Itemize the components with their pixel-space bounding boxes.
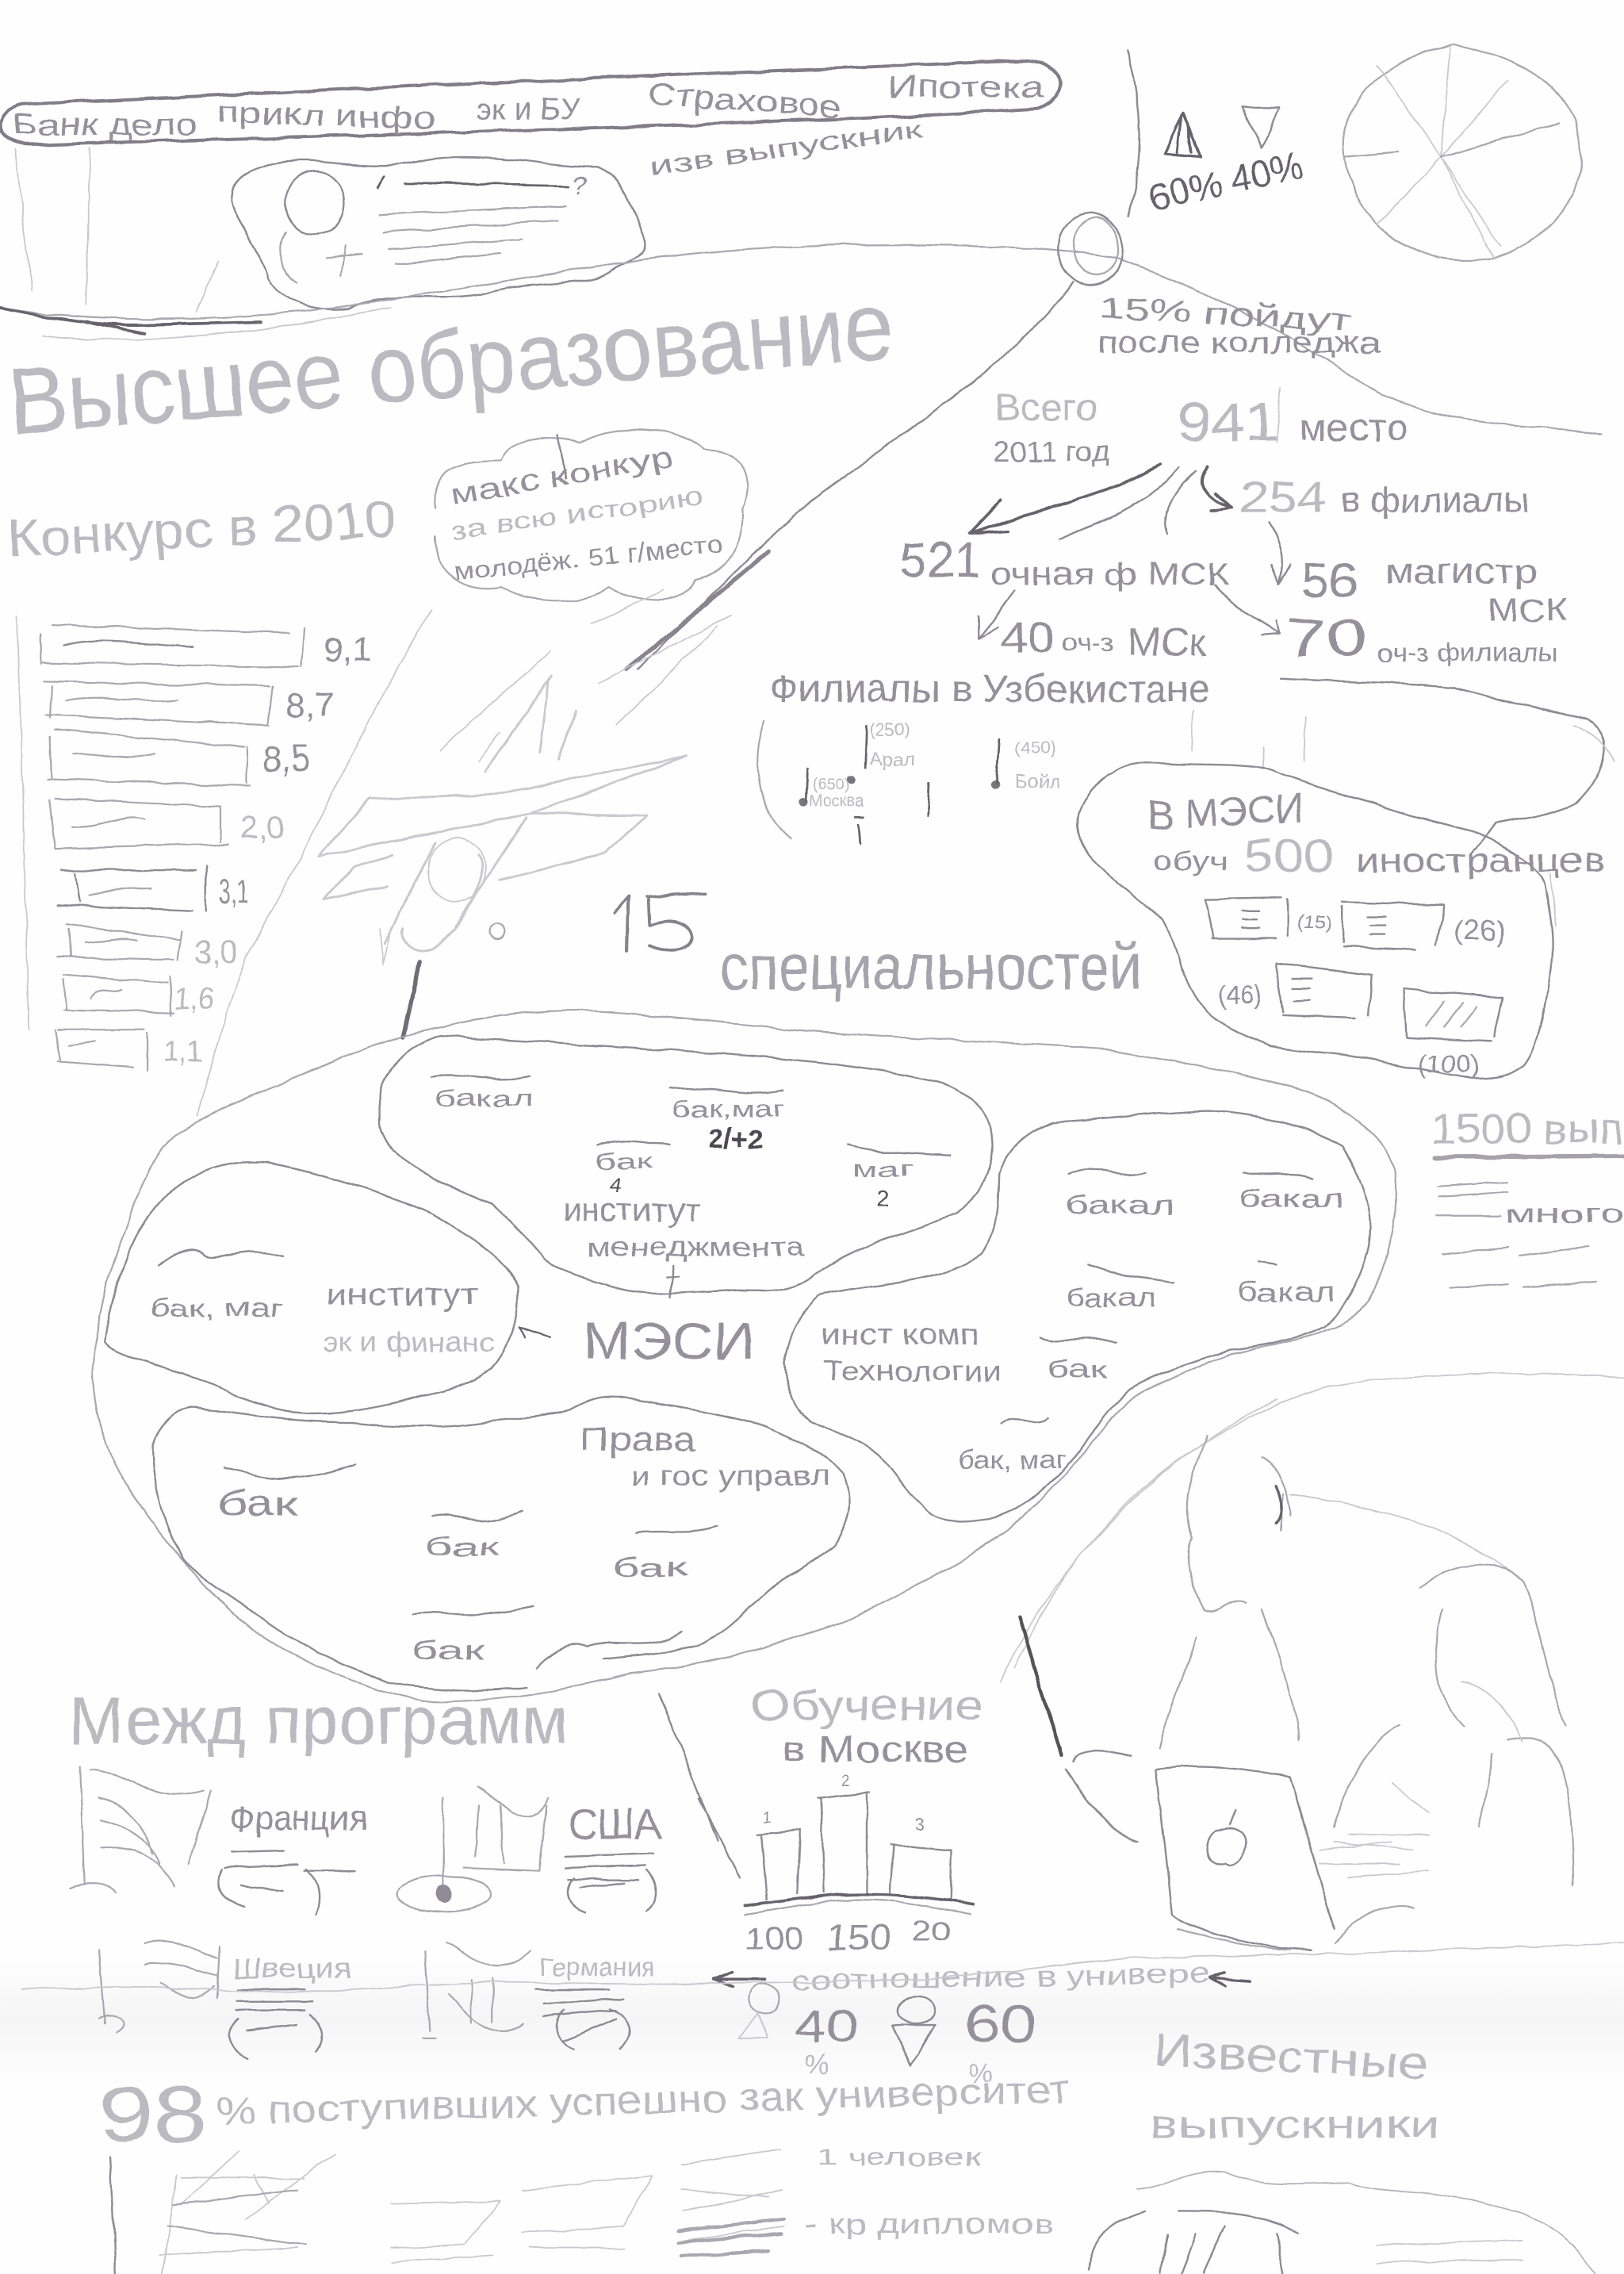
text: 2011: 2011 год: [994, 435, 1109, 467]
arrow left: [714, 1973, 765, 1987]
bak label 1: бак: [217, 1485, 298, 1524]
number: 500: 500: [1244, 830, 1334, 882]
technologies text: Технологии: [822, 1355, 1002, 1387]
label 6: [959, 1418, 1066, 1474]
cloud text line 2: за всю историю: [450, 482, 704, 545]
callout: graduate speech bubble: ?: [573, 171, 588, 200]
blob: institute of economics and finance: [105, 1162, 551, 1413]
callout: graduate speech bubble: [232, 157, 646, 309]
arrow to 521: [968, 464, 1160, 534]
bakal labels: бакал: [1064, 1190, 1174, 1219]
bar chart: competition by speciality: 9,1: [324, 631, 372, 669]
bar chart: competition by speciality: 8,5: [262, 738, 309, 780]
text: full time Moscow: очная ф МСК: [990, 556, 1230, 592]
bak label 2: [425, 1511, 522, 1562]
text: red diplomas: - кр дипломов: [805, 2207, 1054, 2240]
specialities text: специальностей: [721, 932, 1141, 1003]
decorative swoosh beside bars: [196, 609, 432, 1117]
pointer: [1019, 1617, 1061, 1754]
title: Высшее образование: [4, 271, 898, 455]
bar chart: competition by speciality: 3,1: [219, 872, 248, 911]
label: Франция: [229, 1799, 367, 1838]
icon group: book stacks: [110, 2149, 783, 2274]
law text: Права: [580, 1421, 696, 1457]
heading: competition 2010: Конкурс в 2010: [6, 489, 397, 568]
icon: male: [740, 1984, 779, 2038]
box 46: (46): [1218, 981, 1262, 1009]
mag 2 label: маг: [852, 1156, 914, 1181]
text: speciality 1: Банк дело: [12, 108, 197, 142]
label: Швеция: [232, 1952, 351, 1984]
bak label 3: [612, 1526, 718, 1582]
blob: law and public administration: [152, 1396, 850, 1690]
panel: MESI institutes map: [93, 1010, 1396, 1701]
pin: Boyl: Бойл: [1015, 771, 1059, 792]
connector stroke to blob: [403, 963, 419, 1037]
fold line of paper: [21, 1943, 1624, 1992]
line to full-time: [1059, 469, 1197, 539]
panel: study in Moscow: [745, 1681, 983, 1957]
text: MSK part time: МСк: [1128, 619, 1207, 664]
mag 2 label: [848, 1145, 950, 1212]
bar value 1: 100: [745, 1920, 803, 1956]
icon: airplane: [319, 590, 732, 964]
text: foreigners: иностранцев: [1356, 842, 1605, 879]
pin: Aral: (250): [870, 719, 910, 739]
bracket: [218, 1869, 320, 1915]
arrow to 254: [1202, 467, 1232, 511]
text: speciality 2: прикл инфо: [217, 95, 436, 136]
statistic: 98 percent: [98, 2068, 1070, 2157]
statistic: 98 percent: 98: [98, 2070, 208, 2157]
decorative column lines: [14, 148, 217, 312]
arrow to 56: [1269, 522, 1290, 585]
text: total year: Всего: [994, 385, 1097, 429]
text: one person note: 1 человек: [818, 2143, 981, 2171]
text: MSK: МСК: [1488, 592, 1568, 628]
panel: top header bar with specialities: [0, 61, 1061, 145]
bracket: [568, 1869, 656, 1912]
bak label 3: бак: [612, 1553, 688, 1582]
arrowhead right: [1211, 1973, 1250, 1987]
institute text 2: эк и финанс: [324, 1328, 495, 1358]
label 2: бакал: [1239, 1184, 1344, 1214]
institute name 2: менеджмента: [588, 1232, 806, 1261]
flag: Germany: [423, 1943, 656, 2050]
text: master: магистр: [1385, 552, 1537, 591]
number: 521: 521: [901, 534, 982, 589]
flag: France: [70, 1766, 367, 1915]
text: many: много: [1505, 1198, 1624, 1228]
callout: max competition cloud: [435, 429, 747, 601]
statistic text: % поступивших успешно зак университет: [216, 2068, 1070, 2134]
student figure: [1334, 1564, 1573, 1885]
bakalavr label: [431, 1075, 534, 1112]
label 3: [1066, 1264, 1174, 1312]
pin: Moscow: (650): [812, 777, 849, 795]
heading: famous graduates: Известные: [1152, 2024, 1430, 2090]
heading line 2: в Москве: [783, 1729, 968, 1771]
hand: [1066, 1750, 1138, 1842]
cloud text line 1: макс конкур: [448, 440, 675, 511]
number: 56: 56: [1300, 554, 1358, 608]
line 2: выпускники: [1150, 2103, 1440, 2146]
label 4: бакал: [1237, 1277, 1335, 1306]
chart bars: 3: [917, 1816, 925, 1834]
icon: male triangle: [1164, 113, 1201, 156]
panel: 1500 graduates: [1431, 1106, 1624, 1288]
heading: Межд программ: [68, 1683, 569, 1758]
blob: institute of computer technologies: [784, 1111, 1370, 1521]
bar chart: competition by speciality: 1,1: [163, 1035, 203, 1068]
text: students count: обуч: [1153, 846, 1228, 876]
text: college note: после колледжа: [1097, 325, 1381, 359]
institute name: институт: [563, 1191, 700, 1229]
bar value 3: 20: [910, 1916, 952, 1946]
bar chart: competition by speciality: 8,7: [285, 685, 334, 724]
icon: female triangle: [1243, 107, 1279, 148]
number: 60: 60: [964, 1994, 1036, 2053]
text: speciality 4: Страховое: [646, 76, 842, 125]
bak mag label: бак,маг: [672, 1097, 784, 1122]
bar chart: competition by speciality: 3,0: [194, 934, 239, 970]
illustration: students with laptop: [1001, 1374, 1624, 1950]
heading line 1: Обучение: [751, 1681, 983, 1730]
panel: student ratio: [714, 1958, 1250, 2089]
label 4: [1237, 1262, 1335, 1306]
box 26: (26): [1454, 914, 1506, 946]
text: seats: место: [1299, 406, 1408, 450]
bar chart: competition by speciality: 1,6: [174, 982, 214, 1014]
infographic connector line: [638, 283, 1073, 670]
chart bars: 2: [841, 1774, 850, 1791]
cloud text line 3: молодёж. 51 г/место: [453, 530, 724, 585]
number: 40: 40: [795, 2000, 859, 2052]
box 100: (100): [1418, 1049, 1479, 1079]
icon: female: [892, 1997, 935, 2067]
box 15: [1206, 898, 1331, 938]
bak label 4: бак: [412, 1636, 485, 1665]
bak 4 label: 4: [609, 1172, 621, 1197]
bakal labels: [1064, 1170, 1174, 1219]
bak mag label: [670, 1087, 784, 1122]
percent: %: [805, 2050, 829, 2080]
pin: Boyl: [990, 738, 1059, 792]
institute text: инст комп: [822, 1317, 979, 1352]
label: MESI centre: МЭСИ: [583, 1311, 754, 1370]
number: 70: 70: [1286, 608, 1367, 666]
text: 40: 40: [1001, 613, 1055, 662]
panel: gender triangles: [1059, 51, 1308, 286]
label: Германия: [539, 1953, 656, 1981]
text: ratio: соотношение в универе: [790, 1958, 1211, 1996]
label: США: [569, 1799, 661, 1848]
box 100: [1404, 989, 1502, 1079]
bar chart: competition by speciality: [17, 616, 372, 1070]
label 5: [1041, 1337, 1116, 1383]
text: in MESI: В МЭСИ: [1147, 785, 1305, 838]
percent: %: [968, 2059, 993, 2089]
blob: institute of management: [380, 1036, 993, 1298]
pin: Boyl: (450): [1015, 738, 1055, 758]
label 2: [1239, 1172, 1344, 1214]
text: branches: в филиалы: [1341, 481, 1530, 520]
flag: Sweden: [98, 1942, 351, 2059]
number 2+2: 2/+2: [709, 1125, 764, 1155]
teacher figure: [1160, 1436, 1298, 1747]
panel: MESI foreign students: [1078, 762, 1605, 1079]
panel: branches map: [757, 667, 1614, 926]
bakalavr label: бакал: [435, 1087, 534, 1112]
icon: laptop with apple: [1155, 1766, 1428, 1950]
number: 1500: 1500 вып: [1431, 1106, 1624, 1152]
pin: Aral: Арал: [870, 749, 914, 770]
chart bars: [745, 1774, 975, 1915]
chart bars: 1: [763, 1808, 772, 1826]
text: part time Moscow: оч-з: [1061, 629, 1113, 657]
divider swoosh under header: [0, 244, 1603, 435]
text: part time branches: оч-з филиалы: [1377, 638, 1559, 667]
panel: totals tree 2011: [901, 290, 1568, 667]
heading: 15 specialities: [615, 893, 1141, 1003]
arrow to 70: [1215, 585, 1279, 635]
bar chart: competition by speciality: 2,0: [241, 810, 285, 846]
bar value 2: 150: [826, 1918, 892, 1957]
box 26: [1342, 902, 1506, 950]
chart: pie: [1344, 44, 1581, 260]
bak 4 label: [595, 1141, 670, 1197]
flag: USA: [397, 1787, 661, 1912]
bak label 2: бак: [425, 1532, 501, 1562]
label 6: бак, маг: [959, 1445, 1066, 1474]
bak label 1: [217, 1465, 355, 1524]
text: famous graduates note: изв выпускник: [648, 113, 925, 181]
label 5: бак: [1047, 1356, 1109, 1383]
bracket: [556, 2008, 630, 2050]
institute text: институт: [326, 1277, 478, 1313]
panel: graduates portraits: [1087, 2172, 1595, 2274]
bak label 4: [412, 1607, 534, 1665]
text: speciality 5: Ипотека: [887, 71, 1044, 105]
law text 2: и гос управл: [630, 1461, 831, 1491]
box 15: (15): [1298, 911, 1331, 933]
text: speciality 3: эк и БУ: [476, 92, 580, 126]
label 3: бакал: [1066, 1283, 1155, 1312]
bak 4 label: бак: [595, 1149, 654, 1174]
bak mag label: бак, маг: [149, 1294, 283, 1322]
mag 2 label: 2: [877, 1187, 891, 1212]
panel: international programmes: [68, 1683, 661, 2059]
pin: Moscow: Москва: [809, 793, 864, 811]
box 46: [1218, 963, 1372, 1018]
heading: famous graduates: [1150, 2024, 1440, 2146]
heading: branches: Филиалы в Узбекистане: [768, 667, 1211, 711]
connector strokes near bar chart: [660, 1694, 740, 1878]
text: 15 percent note: 15% пойдут: [1097, 290, 1353, 338]
text: percents: 60% 40%: [1145, 144, 1308, 220]
bracket: [229, 2015, 322, 2059]
text: 254 in branches: 254: [1239, 472, 1327, 521]
number: 941: 941: [1178, 391, 1279, 453]
pin: Aral: [847, 719, 914, 784]
arrow to 40: [979, 592, 1015, 638]
pin: bottom: [856, 783, 929, 844]
pin: Moscow: [799, 769, 864, 811]
